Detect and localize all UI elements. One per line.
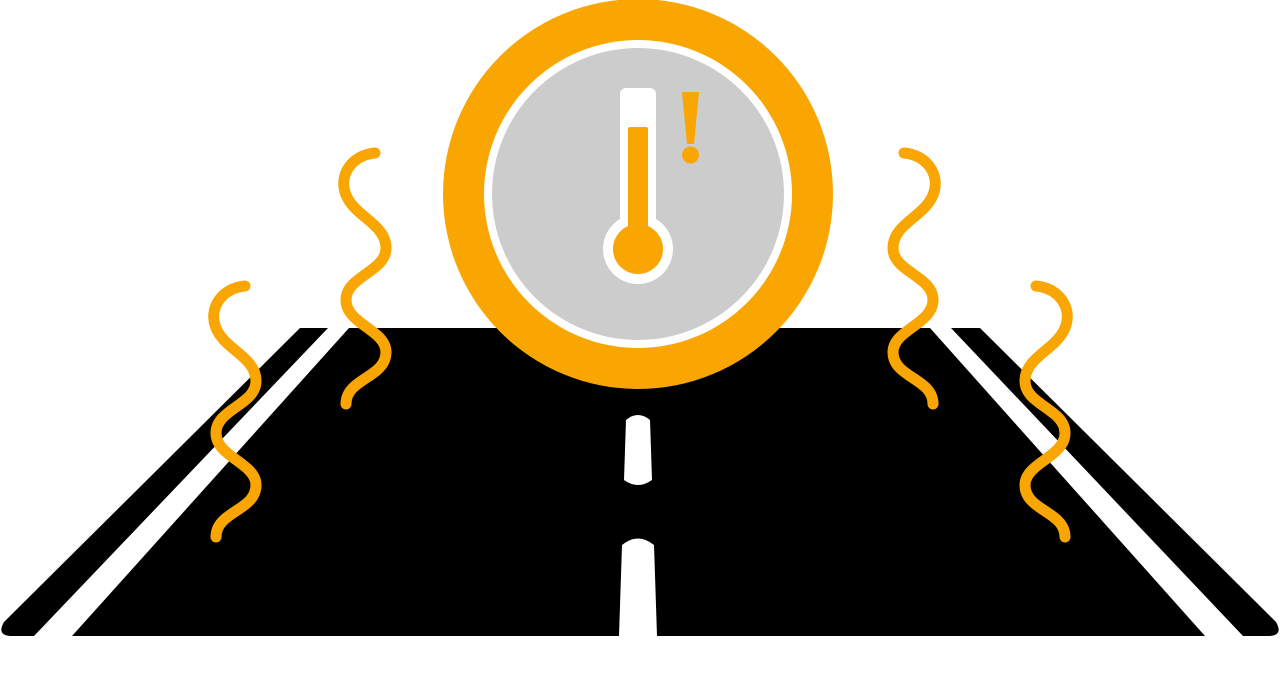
road: [1, 328, 1279, 636]
left edge stripe: [34, 328, 349, 636]
right edge stripe: [930, 328, 1243, 636]
thermometer badge: [443, 0, 833, 389]
centre dashes: [624, 415, 652, 485]
icon: exclamation: [682, 92, 699, 164]
icon: thermometer: [603, 88, 673, 284]
heat waves right: [893, 153, 1067, 537]
heat waves left: [214, 153, 386, 537]
